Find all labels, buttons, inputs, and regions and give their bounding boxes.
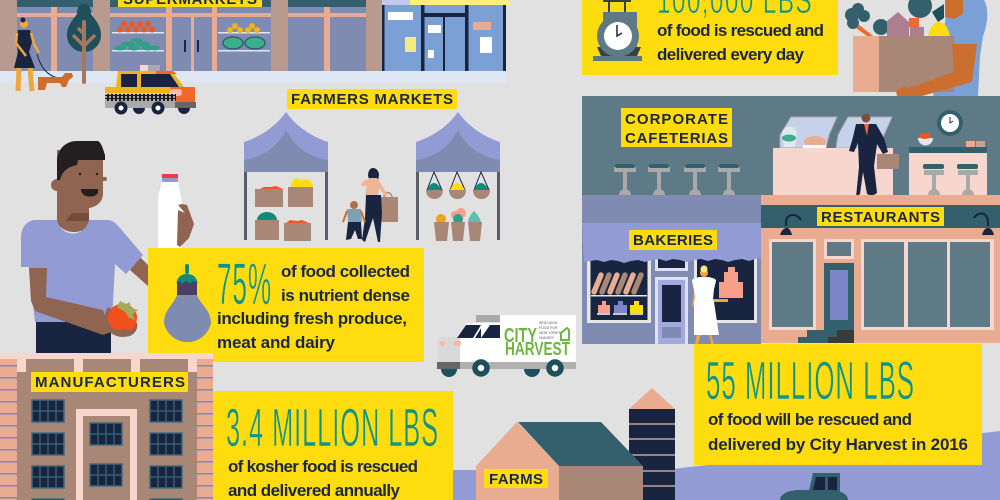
panel: 75% nutrient stat: 75%: [217, 252, 272, 317]
icon: tomatoes on shelf: [117, 21, 155, 32]
icon: left market tent: [244, 112, 328, 241]
panel: 100,000 lbs stat: of food is rescued and: [657, 21, 824, 40]
awning: [582, 223, 761, 263]
panel: 100,000 lbs stat: delivered every day: [657, 45, 805, 64]
panel: manufacturers building: [0, 353, 214, 500]
factory windows: [32, 400, 182, 500]
panel: 75% nutrient stat: including fresh produce,: [217, 309, 407, 328]
icon: green produce on shelf: [114, 38, 160, 50]
icon: taxi: [105, 65, 196, 114]
icon: mother and child shoppers: [343, 168, 398, 242]
icon: right market tent: [416, 112, 500, 241]
windows and door: [769, 239, 994, 343]
logo: City Harvest: RESCUING: [539, 321, 558, 325]
panel: 3.4 million lbs stat: [213, 391, 453, 500]
icon: tree: [67, 4, 101, 84]
panel: 55 million lbs stat: delivered by City Harvest in 2016: [708, 435, 968, 454]
panel: 75% nutrient stat: [148, 248, 424, 362]
icon: City Harvest delivery van: [437, 315, 576, 377]
icon: wall lamps: [780, 213, 994, 235]
icon: businessman with briefcase: [849, 114, 899, 197]
label: restaurants: RESTAURANTS: [821, 209, 940, 226]
icon: watermelons on shelf: [223, 37, 265, 49]
panel: restaurants: [761, 195, 1000, 343]
icon: woman walking dog: [14, 18, 73, 91]
panel: 3.4 million lbs stat: and delivered annually: [228, 481, 401, 500]
logo: City Harvest: HARVEST: [505, 339, 570, 359]
icon: barn: [476, 422, 643, 500]
logo: City Harvest: HUNGRY: [539, 336, 555, 340]
bakery left window with breads and cakes: [587, 255, 651, 323]
logo: City Harvest: FOOD FOR: [539, 326, 558, 330]
lavender hills: [453, 431, 1000, 500]
icon: eggplant: [164, 264, 211, 342]
icon: baker woman in white dress: [692, 266, 728, 344]
panel: 75% nutrient stat: meat and dairy: [217, 333, 336, 352]
label: corporate cafeterias: [621, 108, 732, 147]
label: corporate cafeterias: CORPORATE: [625, 111, 728, 128]
icon: yellow fruit on shelf: [227, 23, 260, 33]
panel: 3.4 million lbs stat: 3.4 MILLION LBS: [226, 398, 439, 458]
panel: 55 million lbs stat: of food will be rescued and: [708, 410, 912, 429]
bakery right window with cake: [694, 255, 757, 323]
panel: 100,000 lbs stat: [582, 0, 838, 75]
logo: City Harvest: [504, 321, 570, 359]
food counter with glass cases: [773, 117, 893, 195]
logo: City Harvest: CITY: [504, 325, 537, 347]
blue storefront: [382, 0, 510, 71]
label: bakeries: BAKERIES: [633, 232, 713, 249]
logo: City Harvest: NEW YORK'S: [539, 331, 562, 335]
icon: bar stools: [614, 164, 740, 195]
panel: 3.4 million lbs stat: of kosher food is rescued: [228, 457, 418, 476]
label: manufacturers: MANUFACTURERS: [35, 374, 185, 391]
panel: 75% nutrient stat: is nutrient dense: [281, 286, 410, 305]
icon: man holding milk and tomato: [21, 141, 194, 354]
icon: tractor: [780, 473, 848, 500]
label: farms: FARMS: [489, 471, 543, 488]
bakery door: [655, 255, 688, 344]
icon: kitchen scale: [593, 0, 642, 61]
label: corporate cafeterias: CAFETERIAS: [625, 130, 728, 147]
panel: corporate cafeterias: [582, 96, 1000, 223]
milk bottle: [158, 182, 183, 248]
panel: bakeries: [582, 223, 761, 344]
label: farmers markets: FARMERS MARKETS: [291, 91, 453, 108]
icon: silo: [629, 388, 675, 500]
panel: supermarkets street scene: [0, 0, 510, 114]
panel: farm barn and silo: [476, 388, 675, 500]
icon: person carrying grocery box: [845, 0, 987, 96]
panel: 75% nutrient stat: of food collected: [281, 262, 410, 281]
panel: farmers markets: [244, 89, 500, 242]
right counter with clock, bowl and cups: [909, 110, 987, 195]
panel: 55 million lbs stat: [694, 344, 982, 465]
